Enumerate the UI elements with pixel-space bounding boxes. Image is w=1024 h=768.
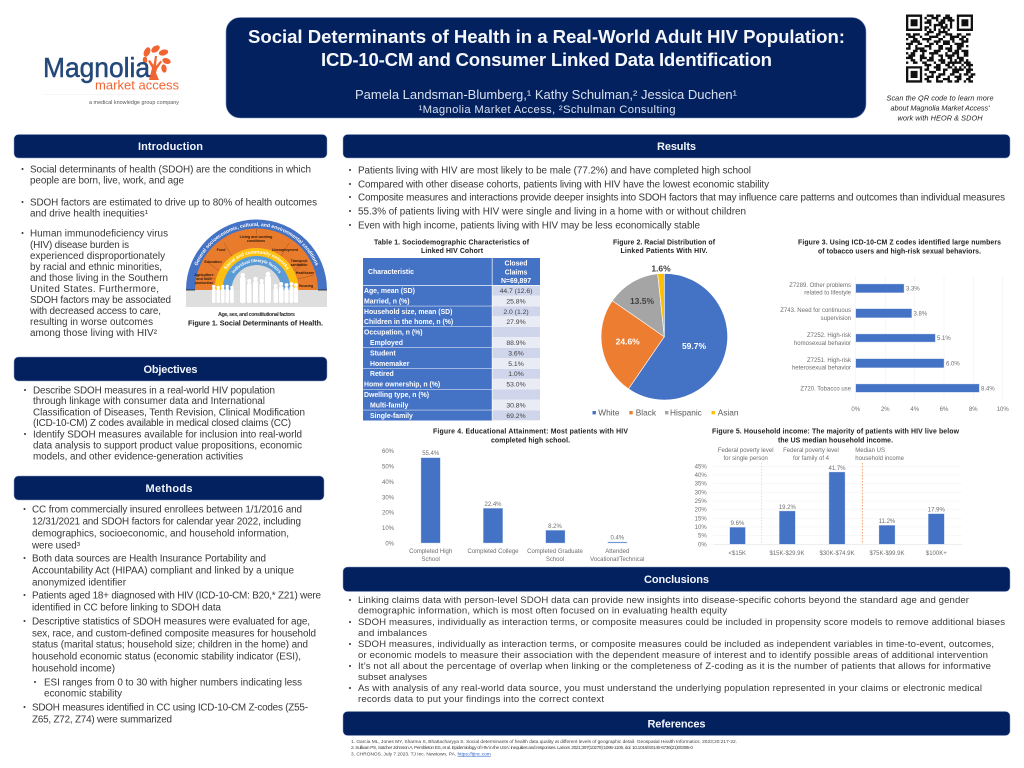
poverty and median annotations: Median US bbox=[855, 448, 885, 454]
table 1: sociodemographic characteristics: Occupation, n (%) bbox=[364, 330, 423, 337]
table 1: sociodemographic characteristics: 27.9% bbox=[506, 319, 526, 326]
panel: objectives bbox=[14, 357, 327, 462]
text block: reference list: 2. Sullivan PS, Satcher Johnson A, Pembleton ES, et al. Epidemiology of HIV in the USA: inequities and responses. Lancet. 2021;397(10279):1095-1106. doi: 10.1016/S0140-6736(21)00395-0 bbox=[351, 745, 693, 751]
title bbox=[248, 26, 845, 70]
figure 4: bar chart of educational attainment: 50% bbox=[382, 464, 395, 470]
figure 2: pie chart of racial distribution: 24.6% bbox=[616, 337, 640, 347]
text block: conclusions bullets: SDOH measures, individually as interaction terms, or composite measures could be included in propensity score models to remove additional biases bbox=[358, 617, 1005, 628]
table 1: sociodemographic characteristics: 25.8% bbox=[506, 298, 526, 306]
authors: ¹Magnolia Market Access, ²Schulman Consulting bbox=[418, 104, 676, 116]
text block: methods bullets: Z65, Z72, Z74) were summarized bbox=[32, 714, 172, 726]
figure 5 title: Figure 5. Household income: The majority of patients with HIV live below bbox=[712, 428, 960, 436]
text block: methods bullets: SDOH measures identified in CC using ICD-10-CM Z-codes (Z55- bbox=[32, 702, 308, 714]
table 1: sociodemographic characteristics: 69.2% bbox=[506, 413, 526, 420]
text block: conclusions bullets: records data to put your findings into the correct context bbox=[358, 694, 604, 705]
heading: objectives: Objectives bbox=[144, 364, 198, 376]
table 1: sociodemographic characteristics: Closed bbox=[505, 260, 527, 268]
text block: results bullets: Patients living with HIV are most likely to be male (77.2%) and have completed high school bbox=[358, 166, 751, 176]
figure 5: bar chart of household income bbox=[695, 428, 962, 557]
text block: objectives bullets: Identify SDOH measures available for inclusion into real-world bbox=[33, 430, 302, 440]
poverty and median annotations: household income bbox=[855, 456, 905, 462]
figure 5: bar chart of household income: 41.7% bbox=[828, 466, 846, 472]
title: Social Determinants of Health in a Real-World Adult HIV Population: bbox=[248, 26, 845, 47]
figure 5: bar chart of household income: 9.6% bbox=[731, 521, 745, 527]
table 1: sociodemographic characteristics: Single-family bbox=[370, 413, 413, 420]
heading: methods: Methods bbox=[146, 483, 192, 495]
text block: results bullets: Composite measures and interactions provide deeper insights into SDOH factors that may influence care patterns and outcomes than individual measures bbox=[358, 192, 1005, 204]
title banner bbox=[226, 18, 866, 118]
figure 3: bar chart of Z codes: 3.8% bbox=[914, 312, 928, 318]
heading: references bbox=[343, 712, 1010, 736]
table 1: sociodemographic characteristics: Age, mean (SD) bbox=[364, 288, 415, 295]
text block: methods bullets: status (marital status; household size; children in the home) and bbox=[32, 640, 308, 650]
table 1: sociodemographic characteristics: Characteristic bbox=[368, 269, 414, 276]
text block: introduction bullets: by racial and ethnic minorities, bbox=[30, 262, 162, 273]
text block: methods bullets: anonymized identifier bbox=[32, 578, 127, 588]
figure 4: bar chart of educational attainment: Attended bbox=[605, 549, 629, 555]
figure 4: bar chart of educational attainment: School bbox=[422, 557, 440, 563]
figure 4: bar chart of educational attainment: Completed College bbox=[467, 549, 519, 555]
table 1: sociodemographic characteristics: 88.9% bbox=[506, 340, 526, 347]
figure 1: social determinants rainbow: and food bbox=[196, 277, 212, 281]
table 1: sociodemographic characteristics: Linked HIV Cohort bbox=[421, 248, 484, 255]
figure 3: bar chart of Z codes: related to lifestyle bbox=[804, 290, 852, 296]
figure 1: social determinants rainbow: Food bbox=[217, 248, 225, 252]
table 1: sociodemographic characteristics: Homemaker bbox=[370, 361, 410, 368]
figure 4: bar chart of educational attainment: 0% bbox=[385, 542, 395, 548]
text block: introduction bullets: and those living in the Southern bbox=[30, 273, 168, 284]
text block: methods bullets bbox=[24, 504, 322, 726]
authors: Pamela Landsman-Blumberg,¹ Kathy Schulman,² Jessica Duchen¹ bbox=[355, 87, 738, 102]
figure 3: bar chart of Z codes: heterosexual behavior bbox=[792, 366, 851, 372]
figure 3: bar chart of Z codes: 6.0% bbox=[946, 362, 960, 368]
figure 1: social determinants rainbow: conditions bbox=[247, 239, 265, 243]
text block: introduction bullets: (HIV) disease burden is bbox=[30, 240, 129, 251]
table 1: sociodemographic characteristics: 1.0% bbox=[508, 371, 524, 378]
text block: conclusions bullets: Linking claims data with person-level SDOH data can provide new insights into disease-specific cohorts beyond the standard age and gender bbox=[358, 595, 970, 606]
table 1: sociodemographic characteristics bbox=[363, 240, 540, 420]
text block: objectives bullets: (ICD-10-CM) Z codes available in medical closed claims (CC) bbox=[33, 418, 291, 429]
text block: introduction bullets: experienced disproportionately bbox=[30, 251, 165, 262]
heading: methods bbox=[14, 476, 324, 500]
text block: methods bullets: household economic status (economic stability indicator (ESI), bbox=[32, 652, 301, 662]
QR caption: about Magnolia Market Access' bbox=[890, 104, 990, 112]
figure 2: pie chart of racial distribution: 59.7% bbox=[682, 341, 706, 351]
figure 1: social determinants rainbow: Education bbox=[204, 260, 222, 264]
figure 3: bar chart of Z codes: 5.1% bbox=[937, 336, 951, 342]
table 1: sociodemographic characteristics: Claims bbox=[505, 270, 527, 276]
text block: objectives bullets: Describe SDOH measures in a real-world HIV population bbox=[33, 386, 275, 396]
text block: methods bullets: sex, race, and custom-defined composite measures for household bbox=[32, 628, 316, 640]
figure 5: bar chart of household income: 19.2% bbox=[779, 505, 796, 511]
figure 4: bar chart of educational attainment: 20% bbox=[382, 511, 395, 517]
text block: methods bullets: were used³ bbox=[31, 540, 81, 552]
text block: reference list: 3. CHRONOS. July 7 2023. TJ Inc. Newtown, PA. https://tjinc.com bbox=[351, 751, 491, 757]
table 1: sociodemographic characteristics: 30.8% bbox=[506, 402, 526, 410]
heading: references: References bbox=[648, 718, 706, 730]
table 1: sociodemographic characteristics: 3.6% bbox=[508, 350, 524, 358]
figure 3 title: Figure 3. Using ICD-10-CM Z codes identified large numbers bbox=[798, 240, 1001, 246]
panel: conclusions bbox=[343, 567, 1010, 705]
table 1: sociodemographic characteristics: Dwelling type, n (%) bbox=[364, 392, 429, 399]
figure 3: bar chart of Z codes: 6% bbox=[940, 407, 949, 413]
figure 5: bar chart of household income: $15K-$29.9K bbox=[769, 551, 805, 557]
logo: Magnolia Market Access bbox=[43, 44, 180, 106]
text block: conclusions bullets: It’s not all about the percentage of overlap when linking or the completeness of Z-coding as it is the number of patients that allows for informative bbox=[358, 661, 991, 672]
figure 1: social determinants rainbow: production bbox=[195, 281, 213, 285]
text block: conclusions bullets: or economic models to measure their association with the dependent measure of interest and to identify possible areas of additional intervention bbox=[358, 650, 988, 661]
QR code bbox=[906, 14, 975, 83]
figure 3: bar chart of Z codes: 0% bbox=[851, 407, 861, 413]
text block: reference list: 1. Garcia ML, Jones MY, Sharma S, Bhattacharyya S. Social determinants of health data quality at different levels of geographic detail. Geospatial Health Informatics. 2023;20:217-22. bbox=[351, 739, 737, 745]
people silhouettes bbox=[212, 272, 298, 303]
figure 2: pie chart of racial distribution bbox=[592, 240, 739, 418]
text block: methods bullets: Descriptive statistics of SDOH measures were evaluated for age, bbox=[32, 616, 310, 628]
figure 3: bar chart of Z codes: Z720. Tobacco use bbox=[800, 386, 852, 392]
figure 5: bar chart of household income: 11.2% bbox=[879, 519, 896, 525]
figure 4: bar chart of educational attainment: 55.4% bbox=[422, 451, 440, 457]
icon: magnolia tree bbox=[142, 44, 171, 80]
panel: results bbox=[343, 134, 1010, 563]
text block: methods bullets: demographics, socioeconomic, and household information, bbox=[32, 528, 289, 540]
authors bbox=[355, 87, 738, 116]
figure 1: social determinants rainbow: sanitation bbox=[291, 263, 307, 267]
figure 1: social determinants rainbow: Figure 1. Social Determinants of Health. bbox=[188, 318, 323, 328]
text block: conclusions bullets: demographic information, which is most often focused on in evaluating health equity bbox=[358, 606, 727, 616]
text block: methods bullets: Accountability Act (HIPAA) compliant and linked by a unique bbox=[32, 566, 294, 576]
figure 4: bar chart of educational attainment: 10% bbox=[382, 526, 395, 532]
figure 1: social determinants rainbow: Individual lifestyle factors bbox=[232, 258, 281, 274]
heading: introduction: Introduction bbox=[138, 141, 203, 153]
poverty and median annotations: Federal poverty level bbox=[783, 448, 839, 454]
figure 1: social determinants rainbow: Healthcare bbox=[296, 271, 314, 275]
figure 1: social determinants rainbow: Agriculture bbox=[194, 273, 214, 277]
text block: introduction bullets bbox=[22, 164, 317, 339]
text block: objectives bullets: data analysis to support product value propositions, economic bbox=[33, 440, 302, 452]
poverty and median annotations bbox=[718, 448, 905, 462]
panel: references bbox=[343, 712, 1010, 757]
panel: methods bbox=[14, 476, 324, 726]
figure 4: bar chart of educational attainment bbox=[382, 428, 644, 563]
figure 1: social determinants rainbow bbox=[186, 220, 327, 328]
table 1: sociodemographic characteristics: Employed bbox=[370, 340, 403, 347]
text block: methods bullets: economic stability bbox=[44, 688, 122, 700]
heading: results: Results bbox=[657, 141, 696, 153]
text block: results bullets: Even with high income, patients living with HIV may be less economically stable bbox=[358, 220, 700, 232]
table 1: sociodemographic characteristics: Married, n (%) bbox=[364, 298, 410, 306]
text block: objectives bullets bbox=[24, 386, 305, 462]
logo tagline: a medical knowledge group company bbox=[89, 100, 179, 106]
heading: introduction bbox=[14, 134, 327, 158]
table 1: sociodemographic characteristics: Household size, mean (SD) bbox=[364, 309, 452, 316]
figure 2: pie chart of racial distribution: Linked Patients With HIV. bbox=[620, 248, 708, 255]
table title: Table 1. Sociodemographic Characteristics of bbox=[374, 240, 530, 246]
figure 2 legend bbox=[592, 408, 739, 418]
figure 4 title: Figure 4. Educational Attainment: Most patients with HIV bbox=[433, 428, 628, 436]
table 1: sociodemographic characteristics: Multi-family bbox=[370, 402, 408, 410]
figure 4: bar chart of educational attainment: Completed High bbox=[409, 549, 452, 555]
panel: introduction bbox=[14, 134, 328, 339]
text block: conclusions bullets bbox=[349, 595, 1005, 705]
figure 1: social determinants rainbow: Unemployment bbox=[272, 248, 299, 252]
text block: introduction bullets: Human immunodeficiency virus bbox=[30, 228, 168, 240]
figure 1: social determinants rainbow: Social and community networks bbox=[224, 251, 289, 270]
text block: objectives bullets: Classification of Diseases, Tenth Revision, Clinical Modification bbox=[33, 408, 305, 418]
figure 5: bar chart of household income: 25% bbox=[695, 499, 707, 505]
text block: introduction bullets: with decreased access to care, bbox=[29, 306, 161, 317]
figure 4: bar chart of educational attainment: Completed Graduate bbox=[527, 549, 584, 555]
figure 2: pie chart of racial distribution: 1.6% bbox=[651, 263, 671, 273]
QR caption bbox=[886, 94, 994, 122]
logo sub-wordmark: market access bbox=[95, 78, 180, 92]
figure 3: bar chart of Z codes: Z7251. High-risk bbox=[807, 358, 852, 364]
text block: introduction bullets: SDOH factors are estimated to drive up to 80% of health outcomes bbox=[30, 198, 317, 208]
table 1: sociodemographic characteristics: N=69,897 bbox=[501, 278, 531, 285]
figure 2 legend: Black bbox=[636, 408, 657, 418]
figure 5: bar chart of household income: 15% bbox=[695, 516, 707, 522]
figure 4: bar chart of educational attainment: completed high school. bbox=[491, 438, 570, 444]
figure 3: bar chart of Z codes bbox=[780, 240, 1009, 413]
figure 5: bar chart of household income: 30% bbox=[695, 490, 707, 496]
text block: methods bullets: 12/31/2021 and SDOH factors for calendar year 2022, including bbox=[32, 516, 301, 528]
table 1: sociodemographic characteristics: Student bbox=[370, 350, 396, 358]
text block: introduction bullets: people are born, live, work, and age bbox=[30, 176, 184, 186]
figure 3: bar chart of Z codes: Z7252. High-risk bbox=[807, 333, 852, 339]
figure 3: bar chart of Z codes: supervision bbox=[821, 316, 851, 322]
figure 1: social determinants rainbow: Transport bbox=[291, 259, 308, 263]
poverty and median annotations: for family of 4 bbox=[793, 456, 830, 462]
figure 5: bar chart of household income: $100K+ bbox=[926, 551, 947, 557]
figure 4: bar chart of educational attainment: 60% bbox=[382, 449, 395, 455]
figure 3: bar chart of Z codes: 8% bbox=[969, 407, 978, 413]
table 1: sociodemographic characteristics: 53.0% bbox=[506, 382, 526, 389]
figure 1 caption: Age, sex, and constitutional factors bbox=[218, 312, 295, 318]
text block: introduction bullets: Social determinants of health (SDOH) are the conditions in which bbox=[30, 164, 311, 176]
table 1: sociodemographic characteristics: 5.1% bbox=[508, 361, 524, 368]
text block: methods bullets: CC from commercially insured enrollees between 1/1/2016 and bbox=[32, 504, 302, 516]
figure 2 legend: Hispanic bbox=[670, 408, 702, 418]
table 1: sociodemographic characteristics: 44.7 (12.6) bbox=[500, 288, 532, 295]
text block: introduction bullets: United States. Furthermore, bbox=[30, 284, 159, 295]
figure 1: social determinants rainbow: Living and working bbox=[240, 235, 272, 239]
text block: methods bullets: Both data sources are Health Insurance Portability and bbox=[32, 554, 266, 564]
figure 2 legend: Asian bbox=[718, 408, 739, 418]
figure 1: social determinants rainbow: General socioeconomic, cultural, and environmental conditions bbox=[194, 222, 318, 266]
figure 2 legend: White bbox=[598, 408, 620, 418]
figure 5: bar chart of household income: 40% bbox=[695, 473, 707, 479]
figure 4: bar chart of educational attainment: 0.4% bbox=[610, 536, 625, 542]
title: ICD-10-CM and Consumer Linked Data Identification bbox=[321, 49, 772, 70]
table 1: sociodemographic characteristics: Children in the home, n (%) bbox=[364, 319, 453, 326]
text block: introduction bullets: SDOH factors may be associated bbox=[30, 295, 171, 306]
figure 4: bar chart of educational attainment: Vocational/Technical bbox=[590, 557, 644, 563]
figure 5: bar chart of household income: $75K-$99.9K bbox=[869, 551, 905, 557]
text block: objectives bullets: through linkage with consumer data and International bbox=[33, 396, 265, 407]
figure 3: bar chart of Z codes: 8.4% bbox=[981, 386, 995, 392]
text block: objectives bullets: models, and other evidence-generation activities bbox=[33, 452, 243, 462]
heading: conclusions bbox=[343, 567, 1010, 592]
text block: introduction bullets: among those living with HIV² bbox=[30, 328, 158, 339]
figure 2: pie chart of racial distribution: 13.5% bbox=[630, 296, 654, 306]
figure 1: social determinants rainbow: Housing bbox=[299, 284, 313, 288]
table 1: sociodemographic characteristics: Retired bbox=[370, 371, 394, 378]
figure 5: bar chart of household income: 0% bbox=[698, 542, 707, 548]
heading: objectives bbox=[14, 357, 327, 381]
figure 3: bar chart of Z codes: 3.3% bbox=[906, 286, 920, 292]
text block: methods bullets: household income) bbox=[32, 664, 115, 674]
text block: results bullets: Compared with other disease cohorts, patients living with HIV have the lowest economic stability bbox=[358, 180, 769, 190]
text block: conclusions bullets: subset analyses bbox=[358, 672, 427, 683]
text block: methods bullets: Patients aged 18+ diagnosed with HIV (ICD-10-CM: B20,* Z21) were bbox=[32, 590, 322, 602]
text block: results bullets bbox=[349, 166, 1005, 232]
text block: introduction bullets: resulting in worse outcomes bbox=[30, 317, 153, 328]
text block: introduction bullets: and drive health inequities¹ bbox=[30, 208, 149, 220]
figure 3: bar chart of Z codes: of tobacco users and high-risk sexual behaviors. bbox=[818, 248, 981, 256]
figure 3: bar chart of Z codes: homosexual behavior bbox=[794, 341, 851, 347]
figure 4: bar chart of educational attainment: 40% bbox=[382, 480, 395, 486]
figure 5: bar chart of household income: 45% bbox=[695, 464, 707, 470]
table 1: sociodemographic characteristics: Home ownership, n (%) bbox=[364, 382, 440, 389]
figure 3: bar chart of Z codes: 2% bbox=[881, 407, 890, 413]
text block: methods bullets: ESI ranges from 0 to 30 with higher numbers indicating less bbox=[44, 678, 302, 688]
figure 5: bar chart of household income: 20% bbox=[695, 508, 707, 514]
figure 5: bar chart of household income: 5% bbox=[698, 534, 707, 540]
text block: methods bullets: identified in CC before linking to SDOH data bbox=[32, 602, 222, 614]
figure 3: bar chart of Z codes: 4% bbox=[910, 407, 920, 413]
figure 3: bar chart of Z codes: 10% bbox=[997, 407, 1009, 413]
figure 2 title: Figure 2. Racial Distribution of bbox=[613, 240, 716, 246]
logo wordmark: Magnolia bbox=[43, 52, 150, 83]
figure 5: bar chart of household income: the US median household income. bbox=[778, 438, 893, 444]
text block: conclusions bullets: As with analysis of any real-world data source, you must understand the underlying population represented in your claims or electronic medical bbox=[358, 683, 982, 694]
heading: results bbox=[343, 134, 1010, 158]
text block: conclusions bullets: and imbalances bbox=[358, 628, 427, 639]
figure 4: bar chart of educational attainment: 8.2% bbox=[548, 524, 562, 530]
figure 4: bar chart of educational attainment: 22.4% bbox=[484, 502, 502, 508]
poverty and median annotations: for single person bbox=[724, 456, 768, 462]
figure 5: bar chart of household income: 17.9% bbox=[928, 507, 945, 513]
figure 4: bar chart of educational attainment: 30% bbox=[382, 495, 395, 501]
table 1: sociodemographic characteristics: 2.0 (1.2) bbox=[503, 309, 529, 316]
QR caption: Scan the QR code to learn more bbox=[886, 94, 994, 102]
heading: conclusions: Conclusions bbox=[644, 574, 709, 586]
figure 5: bar chart of household income: 10% bbox=[695, 525, 707, 531]
text block: reference list bbox=[351, 739, 737, 757]
figure 3: bar chart of Z codes: Z7289. Other problems bbox=[789, 283, 851, 289]
figure 5: bar chart of household income: $30K-$74.9K bbox=[819, 551, 855, 557]
text block: results bullets: 55.3% of patients living with HIV were single and living in a home with or without children bbox=[358, 206, 746, 218]
figure 3: bar chart of Z codes: Z743. Need for continuous bbox=[780, 308, 851, 314]
QR caption: work with HEOR & SDOH bbox=[898, 114, 983, 122]
text block: conclusions bullets: SDOH measures, individually as interaction terms, or composite measures could be included as independent variables in time-to-event, outcomes, bbox=[358, 639, 994, 650]
figure 5: bar chart of household income: 35% bbox=[695, 482, 707, 488]
figure 5: bar chart of household income: <$15K bbox=[729, 551, 746, 557]
poverty and median annotations: Federal poverty level bbox=[718, 448, 774, 454]
figure 4: bar chart of educational attainment: School bbox=[546, 557, 564, 563]
